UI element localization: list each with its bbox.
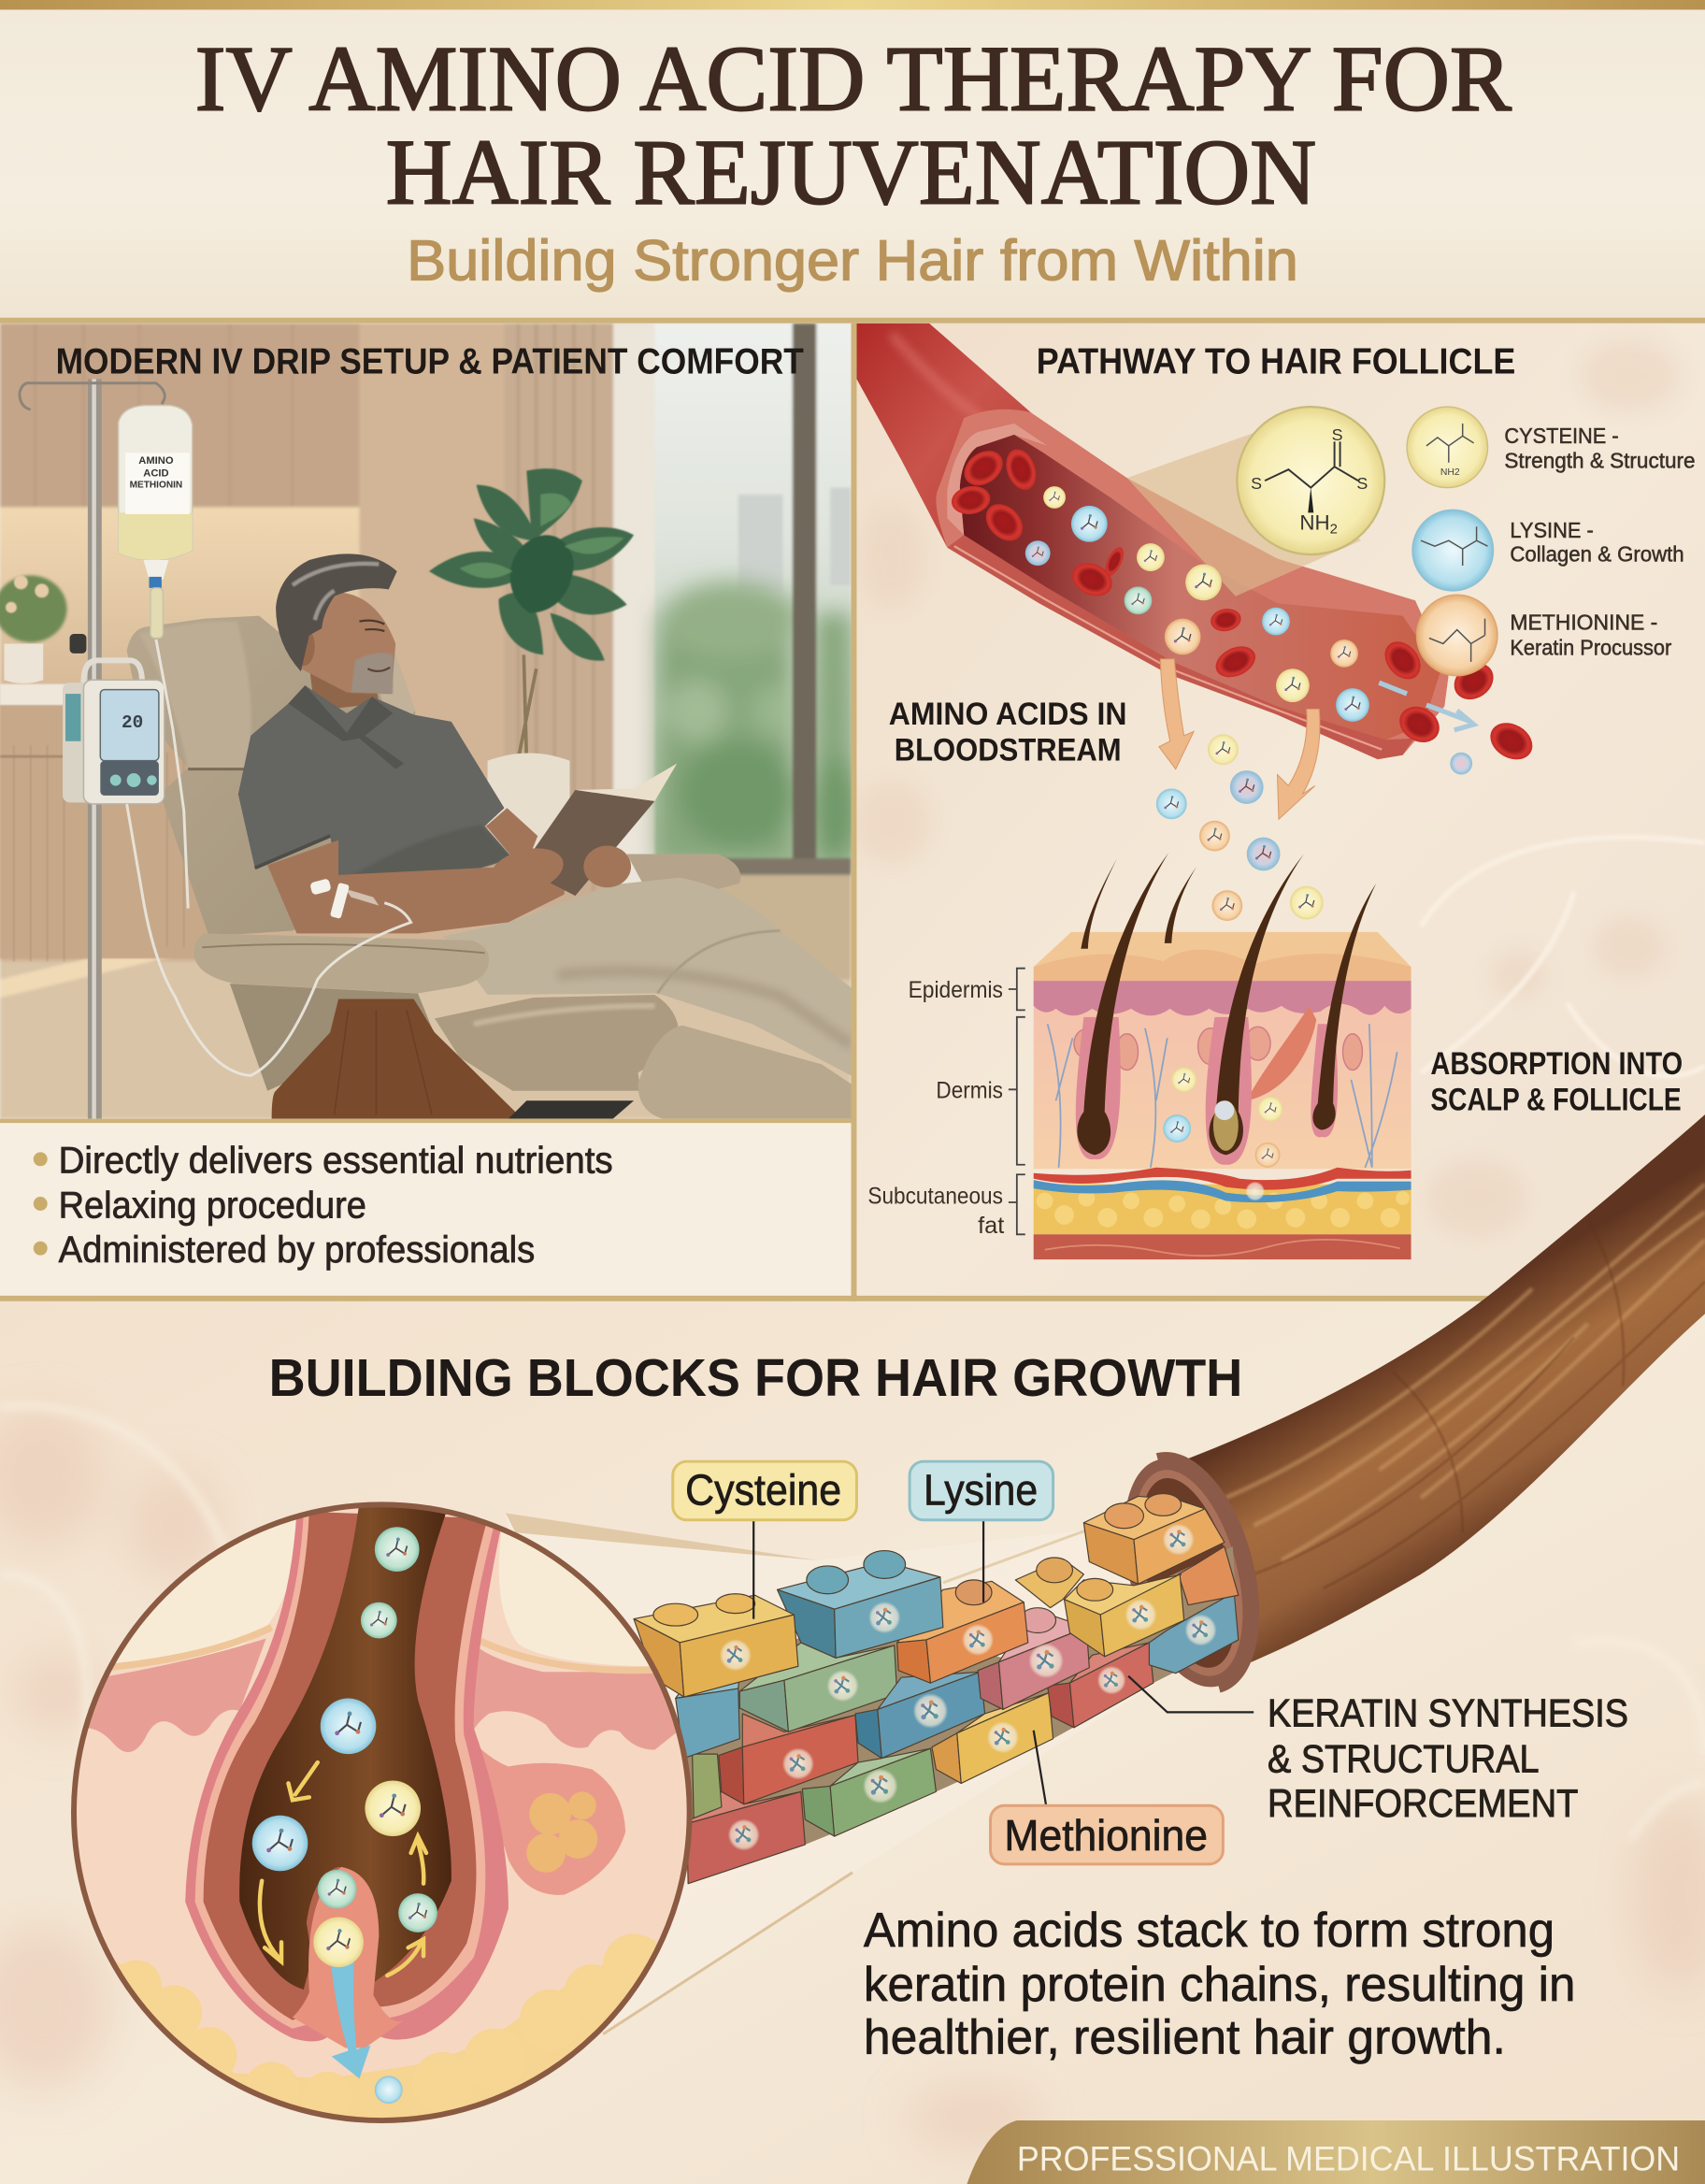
blue flow arrow bbox=[329, 1944, 370, 2078]
right arm pad bbox=[626, 855, 740, 889]
book bbox=[521, 790, 654, 896]
label: keratin synthesis: & STRUCTURAL bbox=[1268, 1737, 1540, 1781]
icon: left flowers bbox=[0, 575, 67, 683]
molecule: large cysteine bubble: S bbox=[1332, 425, 1343, 444]
label: lysine bbox=[1510, 518, 1684, 567]
left arm pad bbox=[193, 933, 489, 993]
title: HAIR REJUVENATION bbox=[386, 121, 1316, 224]
label: absorption bbox=[1430, 1046, 1683, 1118]
keratin brick wall bbox=[634, 1493, 1239, 1884]
molecules on bricks bbox=[720, 1524, 1217, 1851]
blue left bbox=[676, 1672, 739, 1699]
green center bbox=[739, 1643, 895, 1691]
title: IV AMINO ACID THERAPY FOR bbox=[195, 27, 1512, 131]
green bottom bbox=[830, 1748, 930, 1786]
label: amino acids in bloodstream bbox=[889, 697, 1127, 769]
patient bbox=[238, 553, 852, 1075]
cream outside skin bbox=[83, 1477, 304, 1666]
icon: IV bag: METHIONIN bbox=[130, 481, 182, 491]
icon: infusion pump bbox=[63, 660, 165, 804]
molecule: large cysteine bubble bbox=[1237, 407, 1384, 554]
description text: Amino acids stack to form strong bbox=[864, 1904, 1555, 1958]
icon: lysine molecule bbox=[1412, 510, 1493, 591]
yellow top-left bbox=[634, 1595, 794, 1643]
face bbox=[301, 592, 395, 694]
follicle sheath bbox=[185, 1512, 509, 2041]
hairs bbox=[1077, 853, 1376, 1155]
heading: building blocks: BUILDING BLOCKS FOR HAIR GROWTH bbox=[269, 1348, 1242, 1407]
neck bbox=[310, 673, 379, 709]
red right bbox=[1069, 1643, 1149, 1683]
panel: bullet list bbox=[0, 1123, 852, 1296]
molecule: large cysteine bubble: NH bbox=[1299, 510, 1330, 534]
label: epidermis: Epidermis bbox=[909, 977, 1003, 1003]
red bottom-left bbox=[687, 1791, 801, 1824]
follicle sheaths bbox=[1076, 1017, 1338, 1165]
molecule: large cysteine bubble: 2 bbox=[1330, 523, 1338, 538]
icon: plant bbox=[429, 468, 634, 861]
panel: right pathway background bbox=[852, 323, 1705, 1296]
fat cells bbox=[83, 1939, 696, 2174]
molecule: large cysteine bubble: S bbox=[1251, 474, 1262, 493]
label: dermis: Dermis bbox=[936, 1077, 1003, 1103]
icon: IV bag: ACID bbox=[143, 468, 169, 480]
arrow: absorption left bbox=[1159, 659, 1194, 769]
amino acids in bloodstream bbox=[1025, 486, 1472, 775]
skin cross-section bbox=[1034, 853, 1411, 1259]
hair strand bbox=[1101, 1114, 1705, 1702]
foot rest bbox=[435, 995, 679, 1091]
label: methionine: METHIONINE - bbox=[1510, 611, 1657, 635]
bullet 1: Directly delivers essential nutrients bbox=[59, 1140, 613, 1182]
sebaceous gland bbox=[466, 1734, 625, 1895]
amino acids leaving vessel bbox=[1156, 734, 1324, 921]
label: methionine bbox=[1510, 611, 1672, 659]
label: keratin synthesis: REINFORCEMENT bbox=[1268, 1781, 1578, 1825]
wood base bbox=[272, 999, 523, 1119]
magnifier ring bbox=[74, 1504, 690, 2120]
upstream tube bbox=[856, 323, 1031, 548]
title bbox=[195, 27, 1512, 224]
hands bbox=[494, 848, 563, 883]
strand mouth right edge bbox=[1158, 1444, 1275, 1686]
label: subcutaneous fat bbox=[867, 1174, 1025, 1239]
polo shirt bbox=[238, 685, 512, 884]
description text bbox=[864, 1904, 1575, 2065]
cabinet bbox=[0, 684, 209, 961]
heading: pathway: PATHWAY TO HAIR FOLLICLE bbox=[1037, 341, 1515, 381]
label: amino acids in bloodstream: AMINO ACIDS IN bbox=[889, 697, 1127, 732]
label: lysine pill bbox=[910, 1461, 1053, 1602]
label: lysine: Collagen & Growth bbox=[1510, 542, 1684, 567]
icon: recliner chair bbox=[127, 616, 852, 1119]
icon: IV tubing bbox=[127, 639, 411, 1075]
room background bbox=[0, 323, 858, 1119]
sebaceous glands bbox=[1074, 1027, 1362, 1070]
subtitle: Building Stronger Hair from Within bbox=[407, 229, 1298, 293]
label: keratin synthesis bbox=[1128, 1676, 1628, 1825]
blue top bbox=[778, 1561, 940, 1609]
orange lysine block bbox=[897, 1581, 1024, 1643]
panel: bottom background bbox=[0, 1301, 1705, 2184]
magnified follicle bbox=[73, 1477, 696, 2174]
vessels in dermis bbox=[1048, 1024, 1397, 1168]
pink bbox=[998, 1609, 1086, 1662]
label: dermis bbox=[936, 1017, 1025, 1165]
green small left bbox=[693, 1754, 722, 1818]
red blood cells bbox=[950, 443, 1539, 767]
arrow: exit flow right bbox=[1379, 682, 1474, 730]
icon: methionine molecule bbox=[1417, 595, 1497, 676]
magnifier connector cone bbox=[506, 1490, 1198, 2034]
heading: IV drip setup: MODERN IV DRIP SETUP & PATIENT COMFORT bbox=[56, 341, 804, 381]
icon: cysteine molecule: NH2 bbox=[1440, 467, 1460, 478]
blue rear bbox=[1149, 1592, 1239, 1674]
yellow back bbox=[1015, 1559, 1083, 1608]
arrow: absorption right bbox=[1278, 709, 1320, 819]
footer badge: PROFESSIONAL MEDICAL ILLUSTRATION bbox=[1017, 2139, 1680, 2178]
label: lysine pill: Lysine bbox=[924, 1465, 1038, 1514]
gold dividers bbox=[0, 318, 1705, 1301]
label: methionine: Keratin Procussor bbox=[1510, 635, 1672, 659]
label: cysteine: Strength & Structure bbox=[1504, 449, 1696, 473]
label: cysteine pill: Cysteine bbox=[685, 1465, 841, 1514]
icon: IV bag: AMINO bbox=[138, 455, 174, 467]
brick wall backing shadow bbox=[682, 1546, 1239, 1884]
label: lysine: LYSINE - bbox=[1510, 518, 1594, 542]
label: subcutaneous fat: fat bbox=[978, 1213, 1004, 1239]
label: epidermis bbox=[909, 969, 1025, 1010]
icon: IV pole bbox=[20, 379, 165, 1119]
lumen bbox=[960, 435, 1440, 740]
arrector muscle bbox=[1247, 1006, 1316, 1100]
bullet 2: Relaxing procedure bbox=[59, 1184, 366, 1226]
bullet 3: Administered by professionals bbox=[59, 1228, 535, 1271]
yellow flow arrows bbox=[260, 1762, 426, 1976]
footer badge bbox=[967, 2120, 1705, 2184]
yellow mid bbox=[1065, 1574, 1182, 1615]
legs bbox=[443, 878, 852, 1075]
top gold bar bbox=[0, 0, 1705, 9]
label: methionine pill bbox=[991, 1731, 1223, 1864]
connector wedge to molecule bbox=[1127, 432, 1361, 596]
description text: healthier, resilient hair growth. bbox=[864, 2011, 1506, 2065]
icon: IV bag bbox=[119, 406, 193, 639]
papilla bbox=[293, 1867, 404, 2048]
label: cysteine bbox=[1504, 424, 1696, 473]
label: cysteine pill bbox=[673, 1461, 856, 1619]
lower chair side bbox=[230, 984, 438, 1091]
panel: patient photo bbox=[0, 323, 858, 1119]
label: cysteine: CYSTEINE - bbox=[1504, 424, 1619, 448]
molecule: large cysteine bubble: S bbox=[1356, 474, 1368, 493]
bandage bbox=[309, 878, 379, 919]
blue mid bbox=[878, 1672, 981, 1709]
label: methionine pill: Methionine bbox=[1004, 1811, 1208, 1860]
hair bbox=[276, 553, 397, 671]
arms bbox=[267, 841, 567, 933]
orange rear bbox=[1179, 1546, 1239, 1605]
epidermis bbox=[83, 1638, 266, 1752]
amino acid spheres in follicle bbox=[252, 1527, 437, 2104]
hair shaft bbox=[239, 1502, 451, 1990]
label: amino acids in bloodstream: BLOODSTREAM bbox=[895, 733, 1122, 769]
blood vessel bbox=[856, 323, 1449, 759]
orange top bbox=[1083, 1496, 1205, 1540]
icon: cysteine molecule bbox=[1407, 407, 1488, 488]
icon: infusion pump: 20 bbox=[122, 712, 143, 733]
yellow bottom bbox=[957, 1693, 1049, 1733]
vessel wall bbox=[936, 410, 1449, 759]
red center bbox=[742, 1714, 855, 1747]
label: keratin synthesis: KERATIN SYNTHESIS bbox=[1268, 1690, 1628, 1734]
label: subcutaneous fat: Subcutaneous bbox=[867, 1184, 1003, 1210]
description text: keratin protein chains, resulting in bbox=[864, 1958, 1575, 2012]
header panel bbox=[0, 9, 1705, 318]
